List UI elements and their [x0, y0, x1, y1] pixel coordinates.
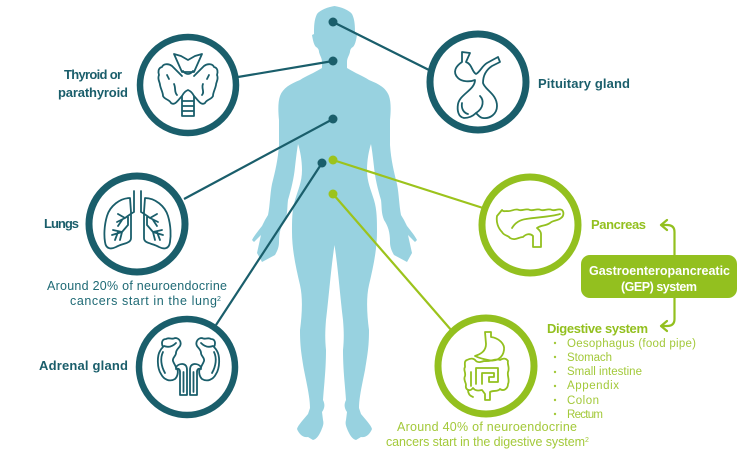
text: digestive statistic: 2: [585, 437, 589, 444]
arrow: GEP to digestive system: [661, 297, 674, 331]
icon: kidneys and adrenal glands in circle: [139, 319, 235, 415]
list: digestive organs: Oesophagus (food pipe): [567, 338, 696, 350]
icon: digestive tract in circle: [438, 318, 534, 414]
icon: pituitary gland in circle: [430, 34, 526, 130]
connector: adrenal gland: [216, 158, 326, 325]
text: lung statistic: 2: [217, 296, 221, 303]
connector: digestive system: [328, 190, 452, 331]
text: lung statistic: cancers start in the lung: [70, 294, 217, 308]
panel: GEP system: Gastroenteropancreatic: [589, 264, 730, 278]
text: lung statistic: Around 20% of neuroendocrine: [47, 279, 227, 293]
connector: pancreas: [328, 156, 483, 208]
text: digestive statistic: cancers start in the digestive system: [386, 435, 585, 449]
label: lungs: Lungs: [44, 216, 79, 231]
list: digestive organs: Small intestine: [567, 366, 642, 378]
panel: GEP system: (GEP) system: [621, 280, 697, 294]
arrow: GEP to pancreas: [661, 220, 674, 256]
connector: lungs: [184, 114, 338, 199]
icon: thyroid in circle: [140, 37, 236, 133]
connector: pituitary gland: [328, 18, 431, 71]
text: digestive statistic: Around 40% of neuroendocrine: [397, 420, 577, 434]
label: pancreas: Pancreas: [591, 217, 646, 232]
text: lung statistic: [47, 279, 227, 308]
label: thyroid or parathyroid: parathyroid: [58, 85, 128, 100]
list: digestive organs: Colon: [567, 395, 599, 407]
heading: digestive system: Digestive system: [547, 321, 648, 336]
icon: pancreas in circle: [482, 177, 578, 273]
connector: thyroid: [238, 56, 338, 77]
label: pituitary gland: Pituitary gland: [538, 76, 630, 91]
label: adrenal gland: Adrenal gland: [39, 358, 128, 373]
list: digestive organs: Rectum: [567, 409, 603, 421]
list: digestive organs: Stomach: [567, 352, 612, 364]
list: digestive organs: Appendix: [567, 380, 619, 392]
list: digestive organs: [554, 338, 696, 421]
human body silhouette: [252, 6, 417, 440]
panel: GEP system: [581, 255, 737, 298]
icon: lungs in circle: [89, 176, 185, 272]
text: digestive statistic: [386, 420, 589, 449]
label: thyroid or parathyroid: [58, 67, 128, 100]
label: thyroid or parathyroid: Thyroid or: [64, 67, 122, 82]
